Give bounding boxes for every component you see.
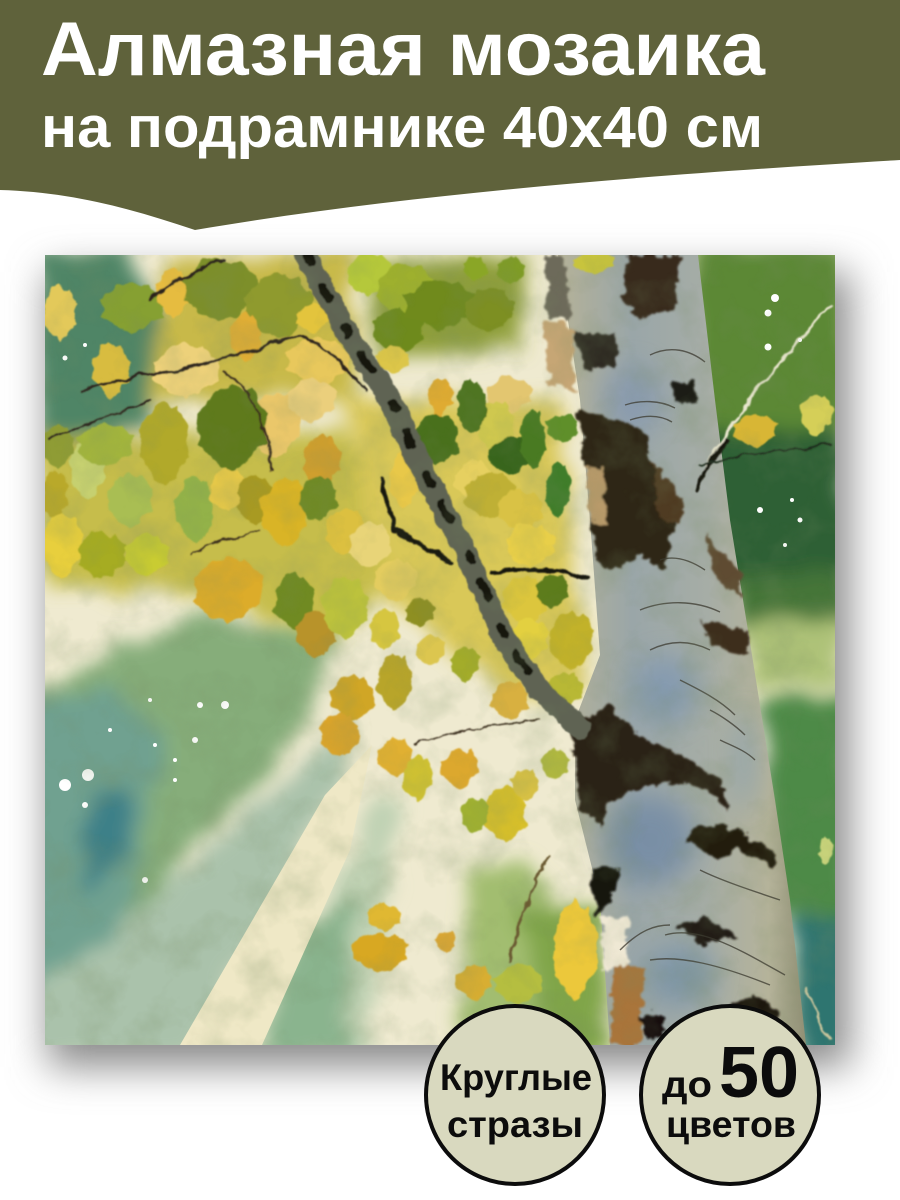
right background foliage [698,255,835,1045]
upper-left teal sky and canopy wash [35,245,590,700]
badge: round rhinestones: Круглые [440,1057,592,1098]
canvas shadow [48,272,850,1067]
badge: up to 50 colours: 50 [719,1033,799,1113]
painting: birch tree in autumn sunlight [20,240,855,1065]
trunk bark patches [542,255,780,1045]
badge: up to 50 colours [641,1006,819,1184]
badge: round rhinestones [426,1006,604,1184]
paint splatter dots [59,294,802,883]
birch trunk [542,255,806,1045]
foliage leaves [41,251,834,1005]
title: Алмазная мозаика [41,7,766,92]
badge: up to 50 colours: цветов [666,1104,796,1145]
badge: round rhinestones: стразы [447,1104,583,1145]
birch branch [50,255,830,1040]
badge: up to 50 colours: до [662,1064,712,1105]
cream light beam [180,745,372,1045]
trunk blue washes [602,365,755,1007]
watercolour mottling [45,255,835,1045]
header banner [0,0,900,230]
sun rays and lower-left washes [20,615,610,1060]
subtitle: на подрамнике 40х40 см [41,95,763,160]
trunk bark lines [620,350,785,985]
